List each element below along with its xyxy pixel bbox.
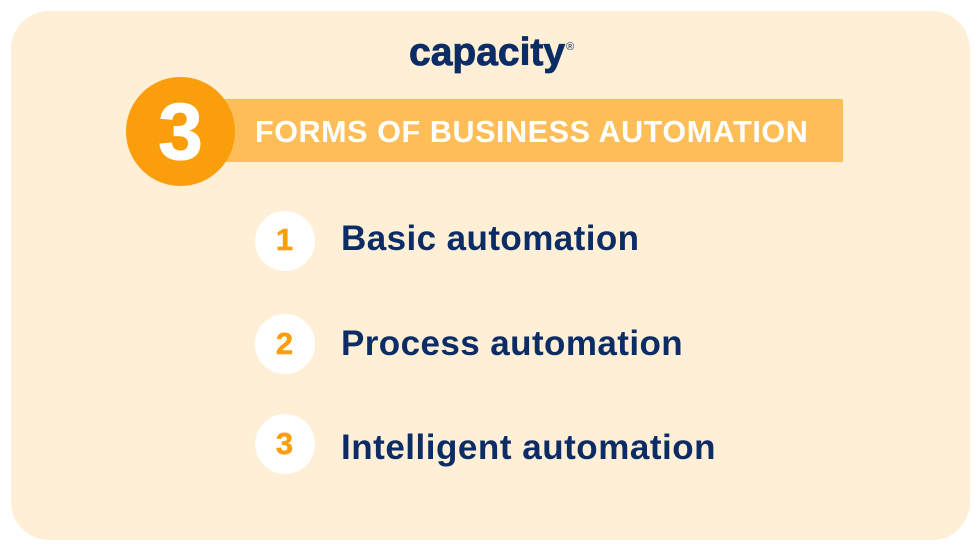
list item label: intelligent automation: Intelligent automation [341, 428, 716, 467]
list item badge: 3: 3 [276, 426, 293, 461]
list item label: process automation: Process automation [341, 324, 683, 363]
heading: forms of business automation: FORMS OF BUSINESS AUTOMATION [255, 115, 808, 149]
badge: large number 3 [126, 77, 235, 186]
list item badge: 1 [255, 211, 315, 271]
list item badge: 3 [255, 414, 315, 474]
logo: capacity: capacity® [409, 31, 574, 74]
list item label: basic automation: Basic automation [341, 219, 639, 258]
list item badge: 2: 2 [276, 326, 293, 361]
list item badge: 1: 1 [276, 222, 293, 257]
banner: heading bar [222, 99, 843, 162]
list item badge: 2 [255, 314, 315, 374]
badge: large number 3: 3 [158, 87, 203, 176]
